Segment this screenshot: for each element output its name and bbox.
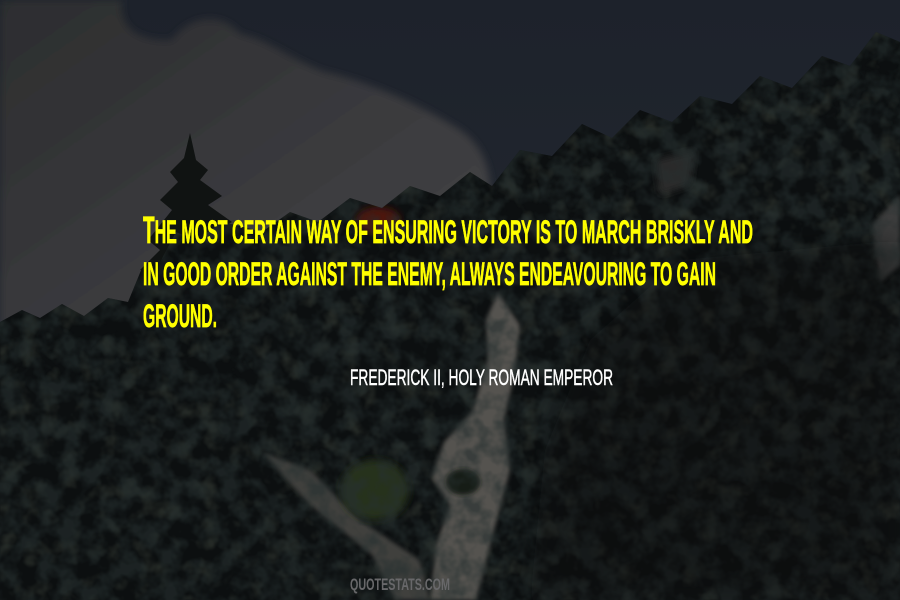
rock in gully [446, 469, 480, 495]
snow patch right [872, 195, 900, 282]
background: cloud [0, 0, 490, 340]
author attribution: FREDERICK II, HOLY ROMAN EMPEROR [350, 365, 613, 390]
quote text [143, 210, 753, 334]
red glow behind text [356, 207, 400, 233]
snow patch lower left [262, 452, 430, 600]
green tree cluster [341, 460, 409, 520]
quote text: GROUND. [143, 298, 217, 334]
tall tree on skyline [140, 133, 240, 270]
snow patch upper right [655, 150, 695, 195]
dark right forest mass [530, 240, 900, 600]
watermark: QUOTESTATS.COM [350, 575, 450, 594]
snow gully [430, 292, 520, 600]
